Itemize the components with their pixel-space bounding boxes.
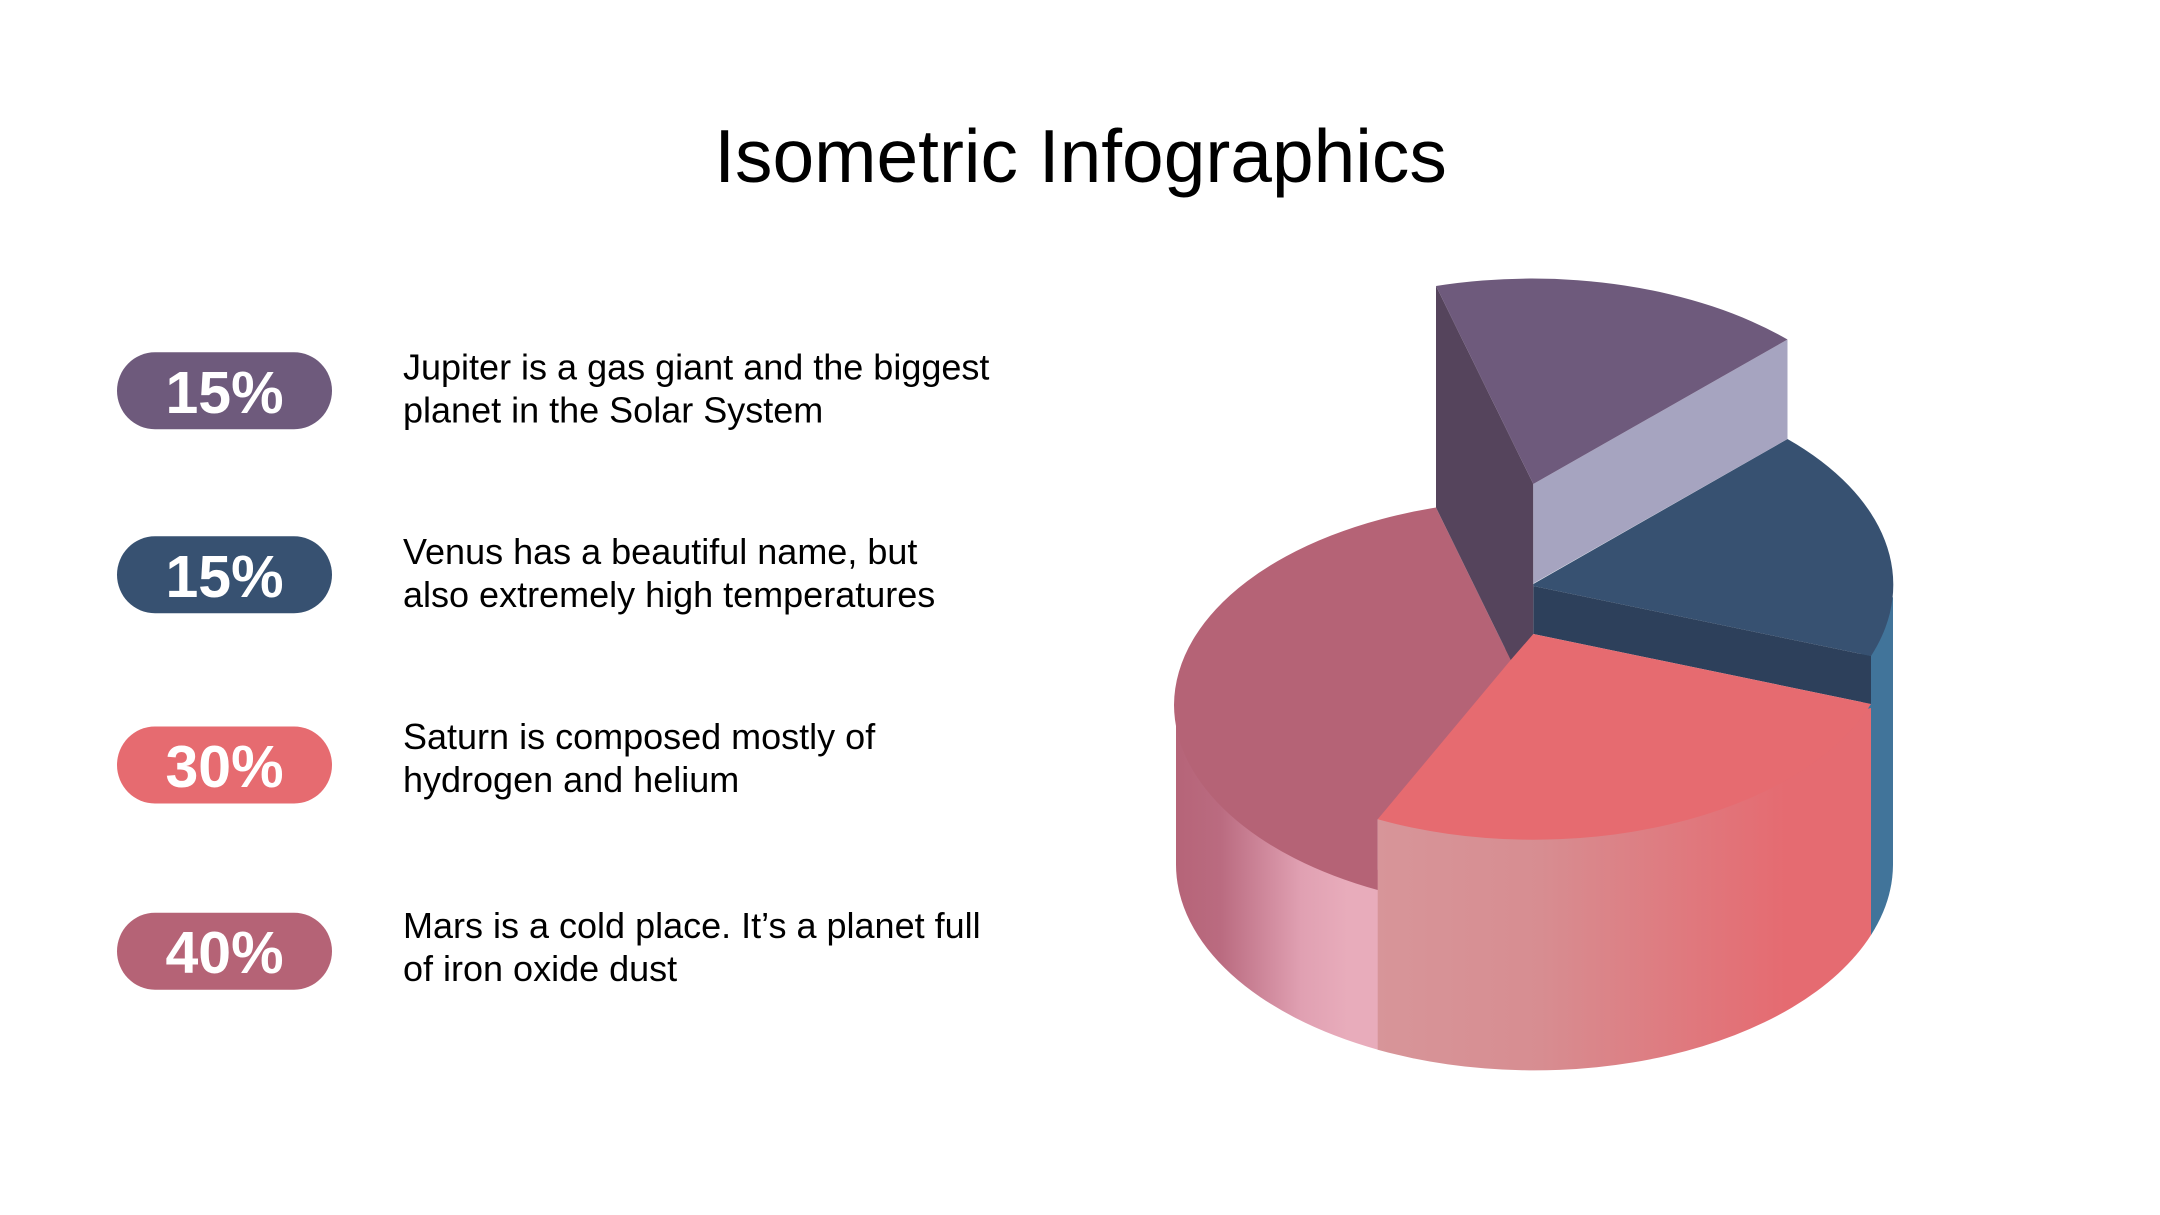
badge: Jupiter 15% (117, 352, 332, 429)
slice: Saturn outer side (1378, 708, 1871, 1070)
badge: Saturn 30% (117, 726, 332, 804)
slice: Venus top (1533, 439, 1893, 656)
slice: Venus outer side (1860, 597, 1893, 935)
row: Saturn 30% (117, 716, 876, 804)
badge: Mars 40%: 40% (165, 920, 284, 986)
slice: Jupiter front wall (1533, 340, 1788, 584)
text: Mars description: of iron oxide dust (403, 948, 677, 989)
slice: Mars outer side (1176, 723, 1378, 1050)
slice: Venus inner wall (1533, 586, 1871, 704)
slice: Saturn top (1370, 634, 1871, 840)
text: Mars description: Mars is a cold place. It’s a planet full (403, 905, 981, 946)
title: Isometric Infographics (714, 114, 1447, 198)
badge: Saturn 30%: 30% (165, 734, 284, 800)
text: Jupiter description: planet in the Solar System (403, 390, 823, 430)
row: Venus 15% (117, 531, 935, 615)
badge: Venus 15%: 15% (165, 544, 284, 610)
text: Saturn description: Saturn is composed mostly of (403, 716, 876, 757)
text: Saturn description: hydrogen and helium (403, 759, 739, 800)
slice: Mars top (1174, 508, 1511, 890)
slice: Jupiter top (1436, 279, 1788, 484)
isometric pie chart (1174, 279, 1893, 1070)
slice: Jupiter left wall (1436, 286, 1533, 660)
text: Venus description: also extremely high temperatures (403, 574, 935, 615)
row: Jupiter 15% (117, 346, 989, 430)
row: Mars 40% (117, 905, 981, 990)
badge: Mars 40% (117, 913, 332, 990)
badge: Venus 15% (117, 536, 332, 613)
badge: Jupiter 15%: 15% (165, 360, 284, 426)
text: Jupiter description: Jupiter is a gas giant and the biggest (403, 346, 989, 388)
text: Venus description: Venus has a beautiful name, but (403, 531, 917, 572)
